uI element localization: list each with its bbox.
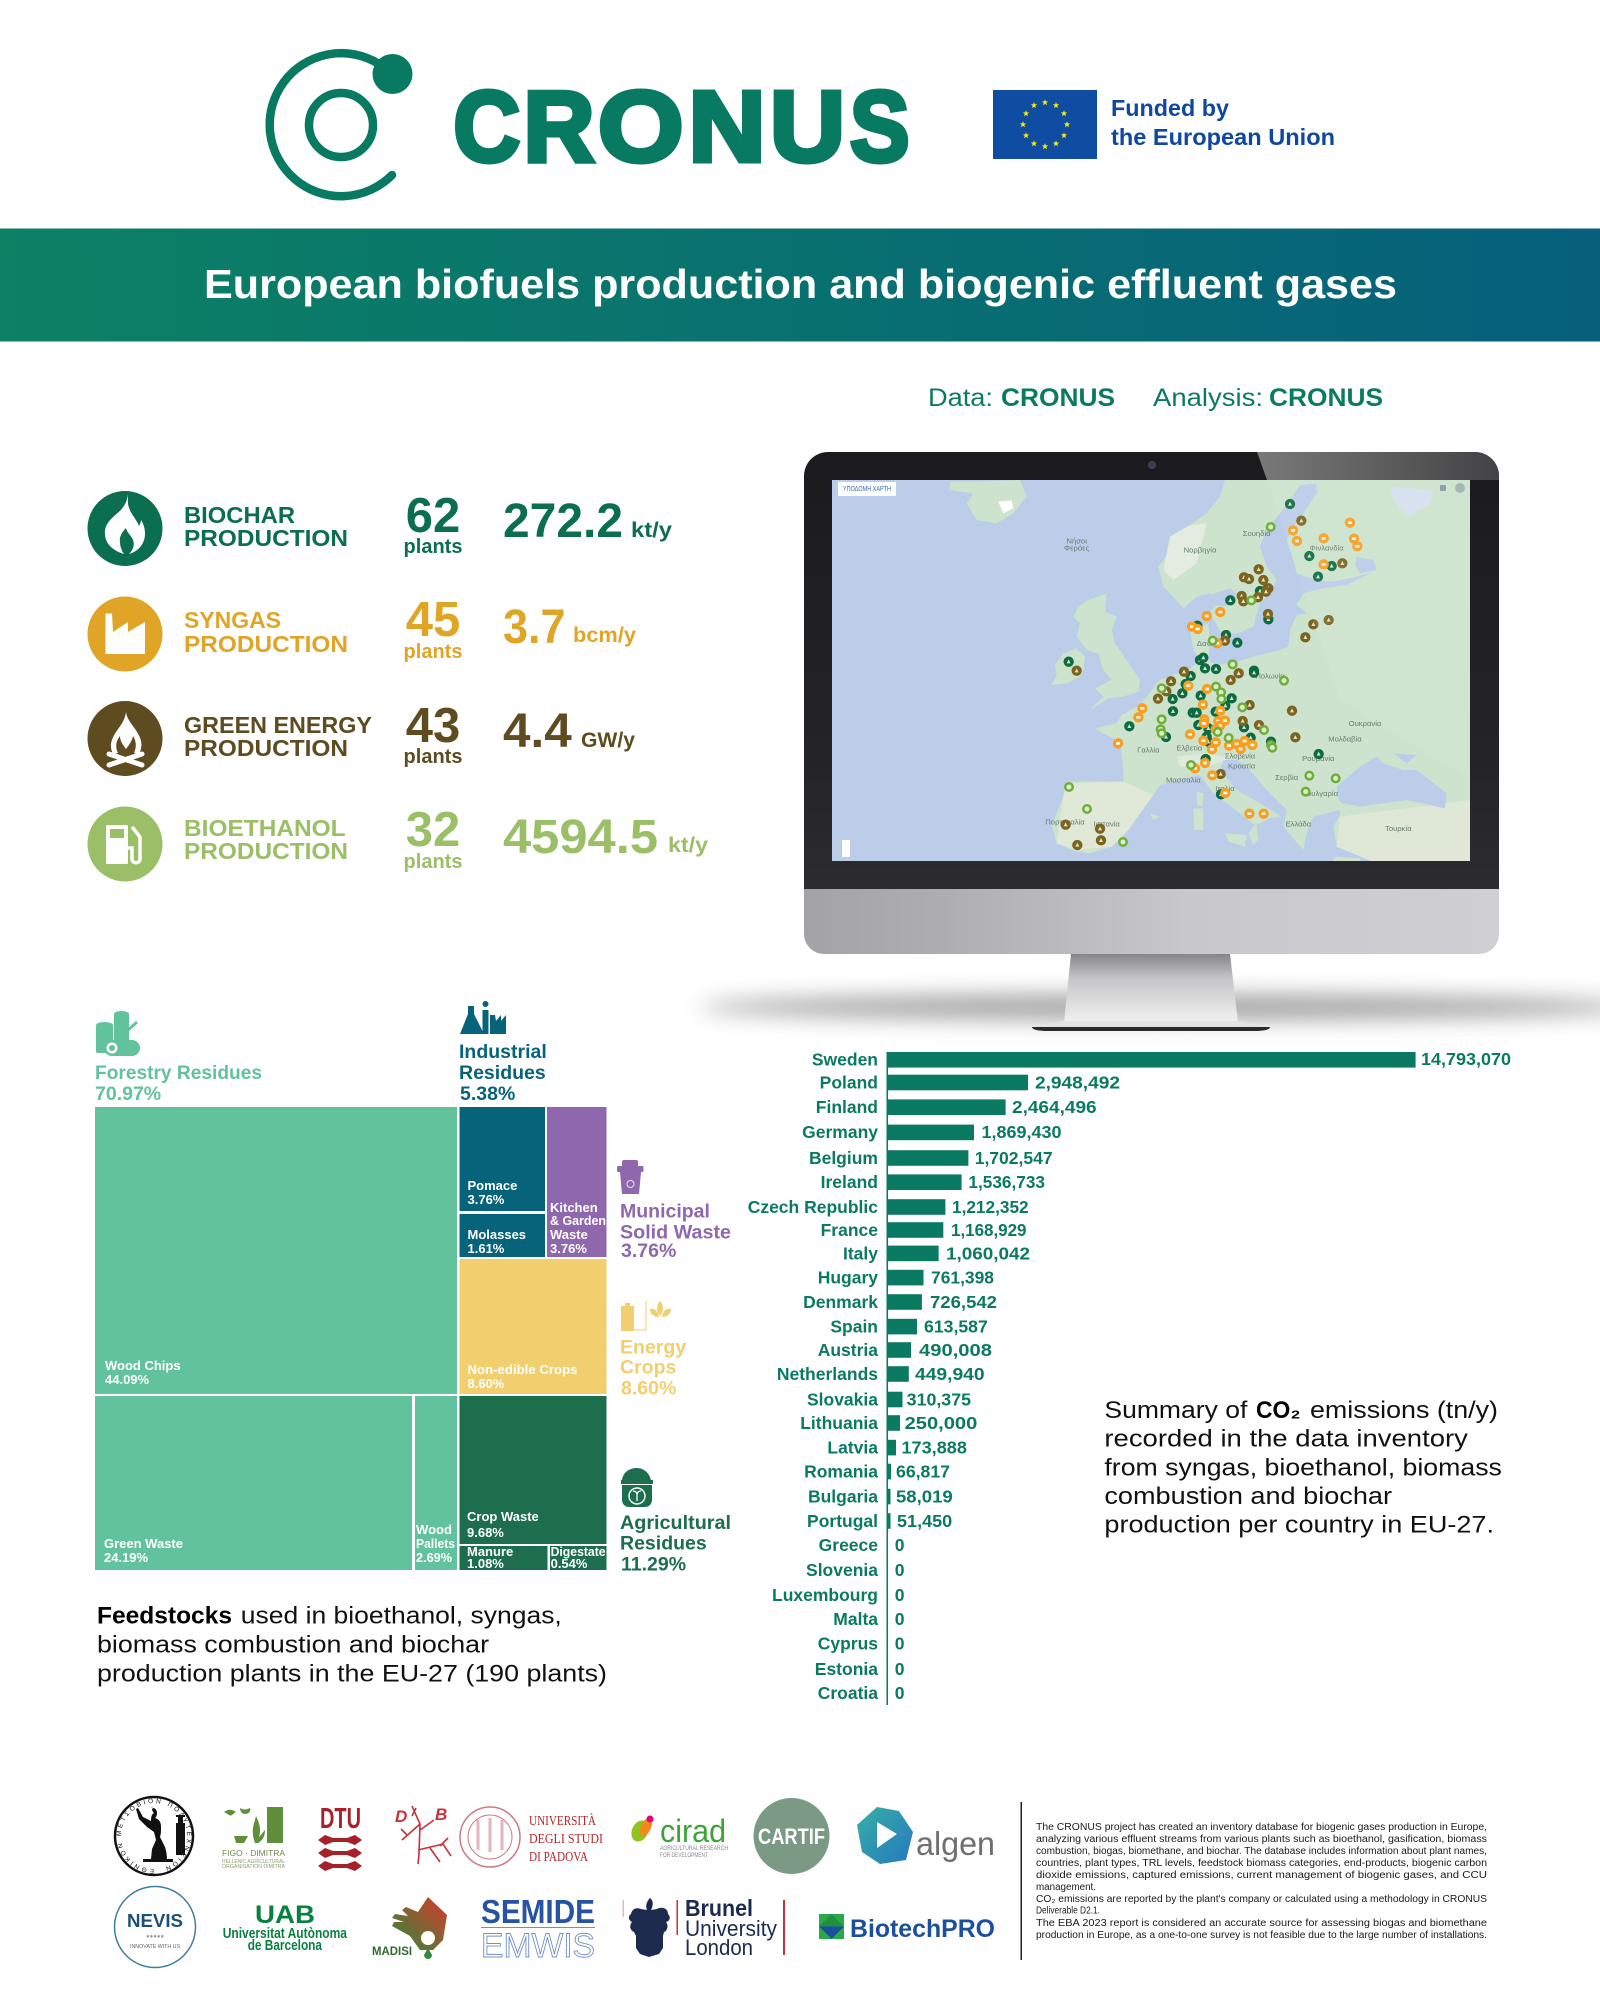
logo wordmark: C — [454, 71, 520, 183]
values — [895, 1049, 1511, 1703]
logo wordmark — [454, 71, 910, 183]
country labels: Malta — [833, 1609, 878, 1629]
label: Agricultural — [620, 1512, 731, 1534]
footnote text: The CRONUS project has created an inventory database for biogenic gases production in Europe, — [1036, 1822, 1487, 1833]
values: 58,019 — [896, 1487, 953, 1507]
logo: CARTIF: CARTIF — [758, 1824, 825, 1849]
forestry residues block: wood chips, green waste, wood pallets: Green Waste — [104, 1536, 183, 1551]
country labels: Poland — [820, 1072, 878, 1092]
plant count: plants — [404, 641, 462, 663]
values: 761,398 — [931, 1268, 994, 1288]
caption: feedstocks: biomass combustion and biochar — [97, 1632, 489, 1658]
title: European biofuels production and biogenic effluent gases — [204, 261, 1397, 307]
credits: data and analysis: Analysis: — [1153, 384, 1263, 412]
map place names: Νήσοι — [1066, 536, 1087, 545]
logo: SEMIDE EMWIS — [481, 1893, 595, 1965]
values: 250,000 — [905, 1413, 978, 1433]
values: 310,375 — [907, 1390, 971, 1410]
logo: cirad: FOR DEVELOPMENT — [660, 1853, 708, 1859]
label: 5.38% — [460, 1083, 515, 1105]
industrial residues block: pomace, molasses: 3.76% — [468, 1192, 505, 1207]
axis — [886, 1052, 888, 1705]
label: Residues — [620, 1532, 707, 1554]
map place names: Μασσαλία — [1166, 776, 1201, 785]
logo: Figo Dimitra: HELLENIC AGRICULTURAL — [222, 1859, 285, 1865]
icon: compost bag — [621, 1464, 656, 1507]
plant count: plants — [404, 536, 462, 558]
country labels: Bulgaria — [808, 1487, 878, 1507]
map title chip: ΥΠΟΔΟΜΗ ΧΑΡΤΗ — [843, 486, 891, 493]
icon: battery and leaves — [621, 1301, 671, 1331]
caption: CO2 summary: production per country in EU-27. — [1104, 1512, 1494, 1538]
energy crops block: 8.60% — [468, 1376, 505, 1391]
funding text: the European Union — [1111, 124, 1335, 150]
map markers: green energy — [1060, 515, 1347, 850]
map place names: Ιταλία — [1215, 784, 1235, 793]
logo wordmark: R — [524, 71, 594, 183]
icon: factory — [88, 596, 162, 672]
map place names: Ουκρανία — [1349, 719, 1382, 728]
forestry residues block: wood chips, green waste, wood pallets: Wood Chips — [105, 1358, 181, 1373]
industrial residues block: pomace, molasses: Molasses — [468, 1227, 526, 1242]
municipal solid waste block: & Garden — [550, 1213, 606, 1228]
logo: Funded by the European Union — [993, 90, 1335, 159]
treemap legend: industrial residues — [459, 1001, 547, 1105]
values: 0 — [895, 1560, 905, 1580]
values: 0 — [895, 1609, 905, 1629]
logo: Figo Dimitra — [222, 1807, 286, 1870]
logo: University of Padova — [460, 1807, 603, 1867]
label — [620, 1512, 731, 1576]
country labels: Luxembourg — [772, 1585, 878, 1605]
map place names — [1045, 529, 1412, 833]
map place names: Τουρκία — [1385, 824, 1412, 833]
label: Forestry Residues — [95, 1062, 262, 1084]
icon: EU flag — [993, 90, 1097, 159]
label: BIOETHANOL — [184, 815, 346, 841]
label: 3.76% — [621, 1240, 676, 1262]
map place names: Σουηδία — [1243, 529, 1271, 538]
row: bioethanol — [88, 803, 708, 882]
country labels: Sweden — [812, 1050, 878, 1070]
logo: SEMIDE EMWIS: SEMIDE — [481, 1893, 595, 1930]
plant count: plants — [404, 746, 462, 768]
label: 70.97% — [95, 1083, 161, 1105]
icon: flask and factory — [460, 1001, 506, 1034]
monitor with plant map — [700, 452, 1600, 1031]
label: GREEN ENERGY — [184, 712, 372, 738]
logo: algen — [857, 1807, 995, 1864]
country labels: Latvia — [827, 1438, 878, 1458]
label: Industrial — [459, 1041, 547, 1063]
caption: feedstocks: used in bioethanol, syngas, — [241, 1602, 562, 1630]
footnote text: analyzing various effluent streams from various plants such as bioethanol, gasification, biomass — [1036, 1834, 1487, 1845]
logo: University of Padova: DEGLI STUDI — [529, 1832, 603, 1847]
map controls — [842, 483, 1465, 857]
capacity: 4594.5 — [503, 811, 658, 864]
plant count: 45 — [406, 593, 460, 647]
map place names: Νορβηγία — [1184, 546, 1217, 555]
map place names: Κροατία — [1228, 762, 1256, 771]
country labels: Lithuania — [800, 1413, 878, 1433]
country labels: Czech Republic — [748, 1197, 878, 1217]
monitor stand — [1032, 954, 1270, 1031]
label: PRODUCTION — [184, 525, 348, 551]
agricultural residues block: Manure — [467, 1544, 513, 1559]
capacity — [503, 705, 635, 758]
monitor body — [804, 452, 1499, 954]
values: 1,869,430 — [982, 1122, 1062, 1142]
map place names: Ρουμανία — [1302, 754, 1335, 763]
values: 66,817 — [896, 1462, 950, 1482]
map place names: Δανία — [1197, 639, 1217, 648]
map place names: Μολδαβία — [1328, 735, 1362, 744]
plant count: 62 — [406, 489, 460, 543]
logo: BiotechPRO: BiotechPRO — [850, 1915, 995, 1943]
logo: Brunel University London — [622, 1895, 785, 1960]
logo: DTU: DTU — [320, 1803, 361, 1835]
label: Solid Waste — [620, 1222, 731, 1244]
plant count: 32 — [406, 803, 460, 857]
country labels: Greece — [819, 1535, 878, 1555]
label: PRODUCTION — [184, 838, 348, 864]
row: syngas — [88, 593, 636, 672]
map title chip — [838, 482, 896, 496]
icon: logs — [96, 1011, 140, 1056]
municipal solid waste block — [547, 1107, 606, 1257]
capacity: bcm/y — [573, 624, 636, 647]
map markers: syngas — [1113, 517, 1362, 819]
bars — [887, 1052, 1416, 1529]
country labels: Croatia — [818, 1683, 878, 1703]
energy crops block: Non-edible Crops — [468, 1362, 578, 1377]
caption: CO2 summary: recorded in the data inventory — [1104, 1426, 1468, 1452]
treemap legend: energy crops — [620, 1301, 686, 1400]
forestry residues block: wood chips, green waste, wood pallets — [95, 1107, 457, 1570]
icon: CRONUS orbit mark — [270, 53, 412, 196]
values: 1,536,733 — [968, 1172, 1045, 1192]
caption: CO2 summary: Summary of — [1104, 1397, 1248, 1424]
forestry residues block: wood chips, green waste, wood pallets: 2.69% — [416, 1550, 452, 1565]
row: green energy — [88, 699, 635, 776]
country labels: Slovenia — [806, 1560, 878, 1580]
industrial residues block: pomace, molasses — [460, 1107, 545, 1257]
logo: DB tree — [395, 1805, 451, 1864]
logo: Figo Dimitra: ORGANISATION DIMITRA — [222, 1864, 286, 1870]
country labels: Denmark — [803, 1292, 878, 1312]
label — [184, 815, 348, 864]
credits: data and analysis: CRONUS — [1001, 384, 1115, 412]
values: 173,888 — [902, 1438, 967, 1458]
capacity: kt/y — [631, 519, 672, 542]
panel: production statistics — [88, 489, 708, 882]
label — [620, 1336, 686, 1400]
caption: CO2 summary — [1104, 1397, 1502, 1538]
plant count: 43 — [406, 699, 460, 753]
treemap legend: agricultural residues — [620, 1464, 731, 1576]
row: biochar — [88, 489, 672, 566]
label: 11.29% — [621, 1554, 686, 1576]
logo: UAB: UAB — [255, 1901, 315, 1929]
logo: Brunel University London: London — [685, 1935, 753, 1960]
label — [95, 1062, 262, 1105]
logo: Brunel University London: Brunel — [685, 1895, 753, 1921]
footnote text — [1036, 1822, 1487, 1941]
logo: cirad — [628, 1813, 728, 1859]
map place names: Φινλανδία — [1310, 544, 1344, 553]
country labels: Germany — [802, 1122, 878, 1142]
map place names: Σερβία — [1275, 773, 1299, 782]
country labels: Belgium — [809, 1148, 878, 1168]
logo wordmark: N — [688, 71, 766, 183]
map of plants — [832, 480, 1470, 862]
map place names: Ισπανία — [1093, 820, 1120, 829]
map place names: Πορτογαλία — [1045, 817, 1085, 826]
logo: UAB: de Barcelona — [248, 1938, 323, 1954]
map place names: Πολωνία — [1255, 672, 1285, 681]
logo: UAB: Universitat Autònoma — [223, 1926, 348, 1942]
country labels: Spain — [830, 1317, 878, 1337]
logo: University of Padova: UNIVERSITÀ — [529, 1812, 597, 1829]
logo: DB tree: B — [435, 1805, 447, 1824]
country labels: Estonia — [815, 1659, 878, 1679]
caption: CO2 summary: emissions (tn/y) — [1310, 1397, 1498, 1424]
country labels: Austria — [818, 1340, 878, 1360]
logo: CARTIF — [754, 1798, 830, 1874]
values: 0 — [895, 1535, 905, 1555]
label — [620, 1200, 731, 1262]
map land — [950, 480, 1470, 862]
country labels: Hugary — [818, 1268, 878, 1288]
logo wordmark: O — [598, 71, 684, 183]
label — [184, 607, 348, 657]
logo: algen: algen — [916, 1825, 995, 1862]
label — [459, 1041, 547, 1105]
country labels: Ireland — [821, 1172, 878, 1192]
label: Crops — [620, 1356, 676, 1378]
capacity — [503, 601, 636, 654]
logo: NEVIS: NEVIS — [127, 1911, 183, 1931]
title banner — [0, 228, 1600, 342]
values: 1,168,929 — [951, 1220, 1027, 1240]
agricultural residues block: 0.54% — [551, 1556, 588, 1571]
logo wordmark: U — [770, 71, 845, 183]
logo: DTU — [318, 1803, 362, 1871]
footnote text: dioxide emissions, captured emissions, current management of biogenic gases, and CCU — [1036, 1870, 1487, 1881]
partner logos — [114, 1796, 995, 1968]
caption: feedstocks — [97, 1602, 607, 1688]
footnote text: management. — [1036, 1882, 1096, 1893]
forestry residues block: wood chips, green waste, wood pallets: Wood — [416, 1522, 452, 1537]
energy crops block — [460, 1259, 606, 1394]
logo: cirad: cirad — [660, 1813, 726, 1849]
country labels: Slovakia — [807, 1390, 878, 1410]
logo: NEVIS — [114, 1886, 196, 1968]
logo: cirad: AGRICULTURAL RESEARCH — [660, 1846, 728, 1852]
label: Energy — [620, 1336, 686, 1358]
capacity: 3.7 — [503, 601, 566, 654]
values: 0 — [895, 1659, 905, 1679]
caption: feedstocks: production plants in the EU-27 (190 plants) — [97, 1660, 607, 1688]
footer divider — [1020, 1802, 1022, 1960]
funding text: Funded by — [1111, 95, 1229, 121]
icon: bin — [617, 1160, 644, 1194]
label: BIOCHAR — [184, 502, 295, 528]
footnote text: The EBA 2023 report is considered an accurate source for assessing biogas and biomethane — [1036, 1918, 1487, 1929]
country labels: Italy — [843, 1244, 878, 1264]
country labels: Romania — [804, 1462, 878, 1482]
agricultural residues block: Crop Waste — [467, 1509, 539, 1524]
values: 449,940 — [915, 1364, 985, 1384]
map place names: Σλοβενία — [1225, 752, 1256, 761]
country labels: Netherlands — [777, 1364, 878, 1384]
caption: feedstocks: Feedstocks — [97, 1602, 232, 1630]
logo wordmark: S — [850, 71, 910, 183]
icon: fuel pump — [88, 806, 162, 882]
footnote text: CO₂ emissions are reported by the plant's company or calculated using a methodology in CRONUS — [1036, 1894, 1487, 1905]
map place names: Βουλγαρία — [1302, 789, 1339, 798]
label: Residues — [459, 1062, 546, 1084]
forestry residues block: wood chips, green waste, wood pallets: 24.19% — [104, 1550, 149, 1565]
logo: NTUA seal: ΕΘΝΙΚΟΝ ΜΕΤΣΟΒΙΟΝ ΠΟΛΥΤΕΧΝΕΙΟΝ — [116, 1798, 192, 1874]
logo: DB tree: D — [395, 1807, 407, 1826]
country labels: Finland — [816, 1097, 878, 1117]
country labels: Portugal — [807, 1511, 878, 1531]
capacity: 272.2 — [503, 495, 623, 548]
values: 490,008 — [919, 1340, 992, 1360]
values: 0 — [895, 1634, 905, 1654]
values: 51,450 — [897, 1511, 952, 1531]
values: 0 — [895, 1683, 905, 1703]
map markers: bioethanol — [1064, 522, 1341, 847]
footnote text: production in Europe, as a one-to-one survey is not feasible due to the large number of installations. — [1036, 1930, 1487, 1941]
capacity: GW/y — [581, 729, 635, 752]
label: 8.60% — [621, 1378, 676, 1400]
agricultural residues block: 9.68% — [467, 1525, 504, 1540]
country labels: Cyprus — [818, 1634, 878, 1654]
credits: data and analysis: Data: — [928, 384, 993, 412]
industrial residues block: pomace, molasses: Pomace — [468, 1178, 517, 1193]
map place names: Ελβετία — [1176, 744, 1203, 753]
municipal solid waste block: Kitchen — [550, 1200, 598, 1215]
forestry residues block: wood chips, green waste, wood pallets: 44.09% — [105, 1372, 150, 1387]
country labels: France — [821, 1220, 878, 1240]
map place names: Γαλλία — [1137, 746, 1160, 755]
footnote text: Deliverable D2.1. — [1036, 1906, 1100, 1916]
footnote text: combustion, biogas, biomethane, and biochar. The database includes information about plant names, — [1036, 1846, 1487, 1857]
values: 613,587 — [924, 1317, 988, 1337]
caption: CO2 summary: CO₂ — [1256, 1397, 1300, 1424]
municipal solid waste block: 3.76% — [550, 1241, 587, 1256]
plant count: plants — [404, 851, 462, 873]
logo: Figo Dimitra: FIGO · DIMITRA — [222, 1849, 286, 1858]
agricultural residues block — [460, 1396, 606, 1571]
treemap legend: forestry residues — [95, 1011, 262, 1105]
logo: SEMIDE EMWIS: EMWIS — [481, 1927, 595, 1965]
map markers: biomass — [1063, 499, 1337, 799]
treemap: feedstocks — [95, 1107, 606, 1571]
values: 0 — [895, 1585, 905, 1605]
label: SYNGAS — [184, 607, 281, 633]
municipal solid waste block: Waste — [550, 1227, 588, 1242]
values: 2,948,492 — [1035, 1072, 1120, 1092]
country labels — [748, 1050, 878, 1703]
agricultural residues block: 1.08% — [467, 1556, 504, 1571]
icon: campfire — [88, 701, 162, 776]
values: 2,464,496 — [1012, 1097, 1097, 1117]
funding text — [1111, 95, 1335, 150]
map relief and seas — [998, 487, 1470, 862]
treemap legend: municipal solid waste — [617, 1160, 731, 1262]
label — [184, 502, 348, 551]
agricultural residues block: Digestate — [551, 1544, 606, 1559]
caption: CO2 summary: combustion and biochar — [1104, 1483, 1392, 1510]
label: PRODUCTION — [184, 735, 348, 761]
values: 1,212,352 — [952, 1197, 1029, 1217]
forestry residues block: wood chips, green waste, wood pallets: Pallets — [416, 1536, 455, 1551]
industrial residues block: pomace, molasses: 1.61% — [468, 1241, 505, 1256]
capacity: 4.4 — [503, 705, 572, 758]
logo: NEVIS: INNOVATE WITH US — [130, 1944, 180, 1950]
logo: University of Padova: DI PADOVA — [529, 1850, 589, 1865]
logo: CRONUS — [270, 53, 910, 196]
logo: MADISI — [372, 1897, 447, 1959]
monitor shadow — [700, 994, 1600, 1020]
logo: UAB — [223, 1901, 348, 1954]
logo: MADISI: MADISI — [372, 1944, 412, 1958]
values: 1,702,547 — [975, 1148, 1053, 1168]
values: 726,542 — [930, 1292, 997, 1312]
credits: data and analysis — [928, 384, 1383, 412]
values: 1,060,042 — [946, 1244, 1030, 1264]
map place names: Ελλάδα — [1285, 820, 1312, 829]
logo: Brunel University London: University — [685, 1916, 777, 1941]
bar chart: CO2 emissions per country — [748, 1049, 1511, 1705]
caption: CO2 summary: from syngas, bioethanol, biomass — [1104, 1454, 1502, 1482]
label — [184, 712, 372, 761]
logo: NEVIS: ●●●●● — [146, 1934, 164, 1940]
footnote text: countries, plant types, TRL levels, feedstock biomass categories, end-products, biogenic carbon — [1036, 1858, 1487, 1869]
label: Municipal — [620, 1200, 710, 1222]
icon: flame — [88, 491, 162, 566]
values: 14,793,070 — [1421, 1049, 1511, 1069]
capacity: kt/y — [668, 834, 708, 857]
credits: data and analysis: CRONUS — [1269, 384, 1383, 412]
label: PRODUCTION — [184, 631, 348, 657]
map place names: Φερόες — [1064, 544, 1090, 553]
